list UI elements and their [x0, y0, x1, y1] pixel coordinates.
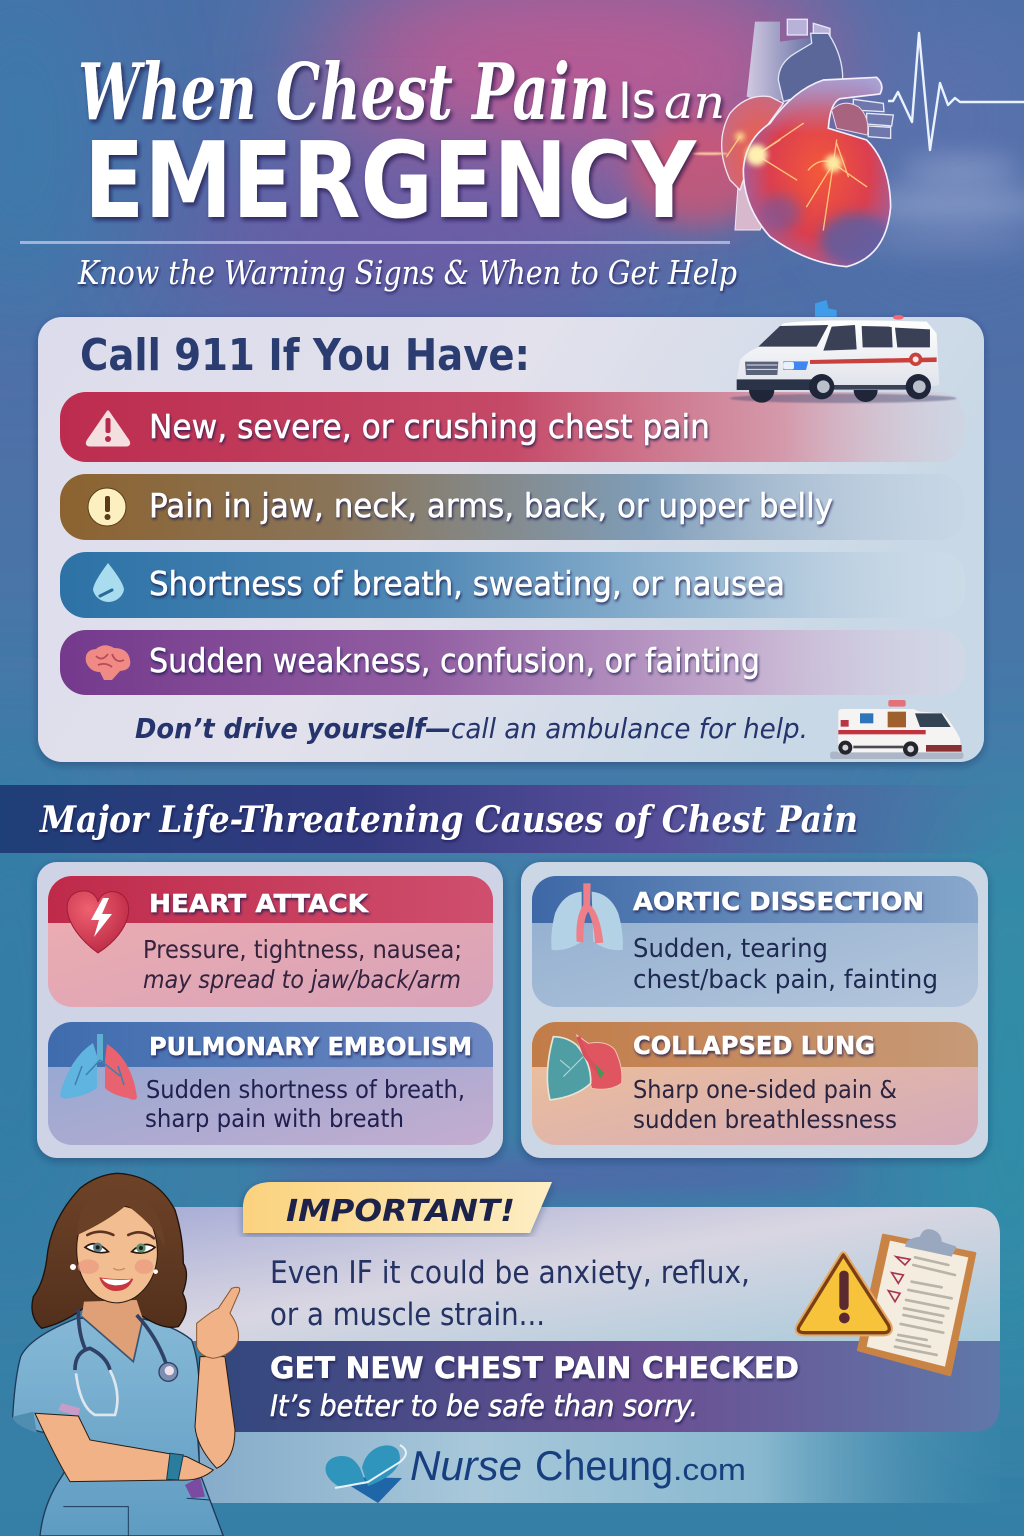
panel: important message: GET NEW CHEST PAIN CHECKED: [270, 1351, 799, 1385]
tab: important: IMPORTANT!: [286, 1194, 515, 1229]
note: call an ambulance: call an ambulance for help.: [451, 712, 808, 745]
crossed arm and pointing hand: [35, 1413, 213, 1482]
card: collapsed lung: COLLAPSED LUNG: [633, 1031, 875, 1060]
card: heart attack: HEART ATTACK: [149, 889, 370, 918]
subtitle: [20, 241, 737, 292]
icon: anatomical heart with glowing arteries: [692, 19, 893, 272]
logo: NurseCheung.com: Nurse: [410, 1442, 522, 1489]
mouth: [99, 1277, 133, 1291]
icon: clipboard and warning sign: [798, 1229, 975, 1375]
stethoscope: [75, 1310, 166, 1370]
title: Is: [618, 72, 656, 130]
icon: large ambulance: [730, 300, 957, 403]
panel: left causes: [37, 862, 503, 1158]
neck and collar: [82, 1300, 143, 1362]
panel: call 911: [38, 317, 984, 762]
note: call an ambulance: [135, 712, 808, 745]
card: pulmonary embolism: PULMONARY EMBOLISM: [149, 1032, 472, 1061]
card: heart attack: Pressure, tightness, nausea;: [143, 935, 462, 964]
title: an: [664, 75, 725, 129]
body scrubs: [13, 1318, 223, 1536]
heading: call 911: Call 911 If You Have:: [80, 330, 530, 381]
icon: small ambulance: [830, 700, 963, 759]
row: radiating pain: Pain in jaw, neck, arms, back, or upper belly: [149, 486, 833, 525]
eyes: [85, 1244, 155, 1253]
card: aortic dissection: [532, 876, 978, 1007]
panel: important message: [173, 1207, 1000, 1432]
hair back: [32, 1173, 186, 1328]
card: heart attack: may spread to jaw/back/arm: [143, 965, 461, 994]
panel: important message: It’s better to be safe than sorry.: [270, 1389, 698, 1423]
head: [77, 1206, 157, 1303]
logo: NurseCheung.com: Cheung: [535, 1442, 673, 1489]
banner: major causes heading: Major Life-Threatening Causes of Chest Pain: [38, 799, 858, 841]
card: collapsed lung: sudden breathlessness: [633, 1105, 897, 1134]
subtitle: Know the Warning Signs & When to Get Help: [77, 253, 737, 292]
logo: NurseCheung.com: .com: [673, 1452, 746, 1487]
card: aortic dissection: AORTIC DISSECTION: [633, 887, 924, 916]
panel: important message: Even IF it could be anxiety, reflux,: [270, 1255, 750, 1291]
illustration: nurse: [13, 1173, 240, 1536]
row: weakness confusion: [60, 630, 965, 695]
card: collapsed lung: [532, 1022, 978, 1145]
row: crushing chest pain: New, severe, or crushing chest pain: [149, 407, 710, 446]
row: shortness of breath: Shortness of breath, sweating, or nausea: [149, 564, 785, 603]
row: shortness of breath: [60, 552, 965, 618]
banner: major causes heading: [0, 785, 1024, 853]
title: [78, 47, 725, 242]
card: aortic dissection: Sudden, tearing: [633, 934, 828, 964]
panel: important message: or a muscle strain...: [270, 1297, 545, 1333]
tab: important: [243, 1182, 552, 1233]
panel: logo strip: [200, 1420, 1000, 1503]
row: crushing chest pain: [60, 392, 965, 462]
card: collapsed lung: Sharp one-sided pain &: [633, 1075, 897, 1104]
row: weakness confusion: Sudden weakness, confusion, or fainting: [149, 641, 760, 680]
card: pulmonary embolism: Sudden shortness of breath,: [146, 1075, 465, 1104]
card: heart attack: [48, 876, 493, 1007]
note: call an ambulance: Don’t drive yourself—: [135, 712, 451, 745]
logo: NurseCheung.com: [326, 1442, 746, 1503]
title: When Chest Pain: [78, 47, 610, 138]
icon: ECG line: [888, 33, 1024, 150]
row: radiating pain: [60, 474, 965, 540]
panel: right causes: [521, 862, 988, 1158]
card: aortic dissection: chest/back pain, fainting: [633, 965, 938, 995]
card: pulmonary embolism: sharp pain with breath: [145, 1104, 404, 1133]
title: EMERGENCY: [84, 120, 698, 242]
card: pulmonary embolism: [48, 1022, 493, 1145]
